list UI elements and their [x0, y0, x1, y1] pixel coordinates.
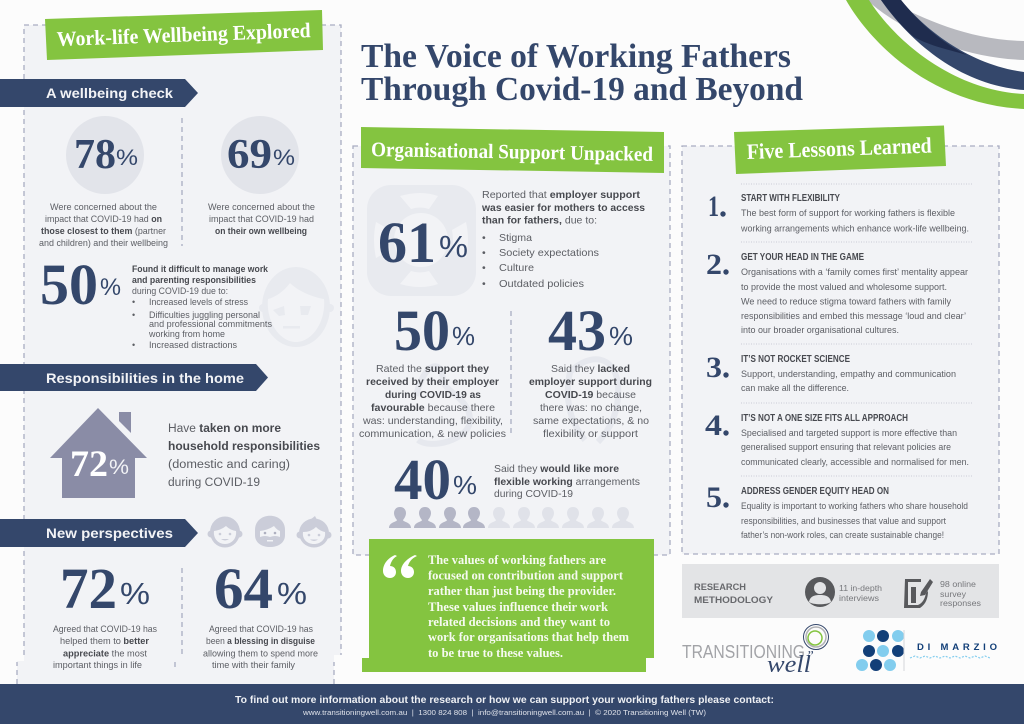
callout: quote: focused on contribution and support	[428, 568, 624, 582]
stat: 43% lacked support: same expectations, & no	[533, 415, 649, 427]
stat: 78%: those closest to them (partner	[41, 226, 166, 237]
lesson 4: communicated clearly, accessible and normalised for men.	[741, 457, 969, 468]
stat: 43% lacked support: Said they lacked	[551, 363, 630, 375]
callout: quote	[362, 539, 654, 672]
stat: 50% difficulty: •	[132, 297, 135, 307]
lesson 4: 4	[705, 409, 722, 442]
heading: work-life wellbeing explored	[45, 10, 323, 60]
callout: quote: related decisions and they want to	[428, 615, 610, 629]
lesson 1: working arrangements which enhance work-life wellbeing.	[740, 224, 969, 234]
stat: 61%: Society expectations	[499, 247, 599, 259]
main title: The Voice of Working Fathers	[361, 38, 791, 75]
panel: research methodology: survey	[940, 589, 967, 599]
stat: 43% lacked support: there was: no change,	[540, 402, 642, 414]
heading: five lessons learned	[734, 126, 946, 174]
stat: 50% difficulty	[40, 252, 272, 350]
icon: interview person	[805, 577, 835, 607]
footer	[0, 684, 1024, 724]
lesson 5: responsibilities, and businesses that value and support	[741, 516, 946, 527]
icon: bearded face	[255, 516, 285, 547]
stat: 50% difficulty: during COVID-19 due to:	[132, 286, 228, 296]
panel: research methodology: RESEARCH	[694, 582, 746, 593]
icon: quotation mark	[383, 555, 417, 578]
stat: 50% difficulty: working from home	[148, 329, 225, 339]
stat: 50% difficulty: and parenting responsibilities	[132, 275, 256, 285]
lesson 5: ADDRESS GENDER EQUITY HEAD ON	[741, 486, 889, 497]
stat: 69%: 69	[227, 132, 272, 178]
lesson 2: Organisations with a ‘family comes first’ mentality appear	[741, 267, 968, 278]
heading: organisational support unpacked	[361, 127, 664, 173]
lesson 2: responsibilities and embed this message ‘loud and clear’	[741, 311, 966, 322]
lesson 2: We need to reduce stigma toward fathers with family	[741, 296, 951, 308]
stat: 50% favourable: communication, & new policies	[359, 428, 506, 440]
ribbon: a wellbeing check	[0, 79, 198, 107]
stat: 72% perspective: Agreed that COVID-19 has	[53, 624, 157, 635]
stat: 69%: impact that COVID-19 had	[209, 214, 314, 225]
stat: 50% favourable: received by their employer	[366, 376, 499, 388]
stat: 43% lacked support: COVID-19 because	[545, 389, 636, 401]
lesson 2: into our broader organisational cultures.	[741, 325, 899, 336]
icon row: people pictogram	[389, 507, 634, 528]
stat: 50% difficulty: Increased distractions	[149, 340, 237, 350]
ribbon: responsibilities in the home	[0, 364, 268, 391]
stat: 40% flexible working: 40	[394, 447, 451, 512]
panel: research methodology: interviews	[839, 593, 879, 603]
icon: hand watermark right	[568, 359, 618, 442]
panel: research methodology	[682, 564, 999, 618]
ribbon: responsibilities in the home: Responsibilities in the home	[46, 370, 244, 386]
icon: survey document	[904, 579, 933, 608]
stat: 61%: •	[482, 278, 486, 290]
stat: 61%: •	[482, 247, 486, 259]
heading: organisational support unpacked: Organisational Support Unpacked	[371, 139, 654, 166]
panel: five lessons learned	[682, 126, 999, 554]
panel: research methodology: 98 online	[940, 579, 976, 589]
stat: 50% favourable: 50	[394, 298, 450, 363]
stat: 43% lacked support: flexibility or support	[543, 428, 638, 440]
stat: 50% difficulty: and professional commitments	[149, 319, 272, 329]
stat: 40% flexible working: during COVID-19	[494, 488, 573, 500]
stat: 61%: •	[482, 262, 486, 274]
logo: transitioning well: TRANSITIONING	[682, 642, 805, 662]
stat: 43% lacked support	[529, 298, 652, 440]
panel: work-life wellbeing	[0, 10, 341, 684]
text: household responsibilities: (domestic and caring)	[168, 459, 290, 471]
panel: research methodology: METHODOLOGY	[694, 595, 774, 606]
stat: 50% difficulty: %	[100, 274, 121, 301]
stat: 72% perspective: 72	[60, 556, 117, 621]
lesson 5: father’s non-work roles, can create sustainable change!	[741, 530, 944, 541]
stat: 61%: •	[482, 232, 486, 244]
lesson 4: generalised support ensuring that relevant policies are	[741, 442, 951, 453]
text: household responsibilities	[168, 423, 320, 489]
stat: 40% flexible working: flexible working arrangements	[494, 476, 640, 488]
text: household responsibilities: Have taken on more	[168, 423, 281, 435]
stat: 50% difficulty: •	[132, 310, 135, 320]
stat: 50% difficulty: 50	[40, 252, 98, 317]
stat: 40% flexible working	[394, 447, 640, 512]
stat: 64% perspective: 64	[214, 556, 273, 621]
stat: 72% perspective: appreciate the most	[63, 648, 147, 660]
lesson 2: GET YOUR HEAD IN THE GAME	[741, 252, 864, 263]
icon: child face	[296, 516, 332, 548]
stat: 72% perspective: helped them to better	[60, 636, 149, 647]
stat: 50% difficulty: •	[132, 340, 135, 350]
lesson 4	[705, 409, 969, 468]
callout: quote: work for organisations that help them	[428, 630, 630, 644]
stat: 50% favourable: was: understanding, flexibility,	[362, 415, 503, 427]
stat: 61%: Reported that employer support	[482, 189, 641, 201]
stat: 50% favourable: favourable because there	[371, 402, 495, 414]
lesson 2	[706, 248, 968, 336]
icon: lifebuoy watermark	[367, 185, 476, 296]
lesson 3: can make all the difference.	[741, 383, 849, 394]
lesson 1: 1	[708, 190, 719, 223]
stat: 78%	[39, 116, 168, 249]
stat: 50% difficulty: Found it difficult to manage work	[132, 264, 269, 274]
stat: 64% perspective: time with their family	[212, 660, 295, 671]
lesson 3	[706, 351, 956, 394]
stat: 69%: on their own wellbeing	[215, 226, 307, 237]
main title: Through Covid-19 and Beyond	[361, 71, 803, 108]
stat: 61%: Culture	[499, 262, 534, 274]
stat: 72% perspective	[53, 556, 157, 671]
stat: 78%: impact that COVID-19 had on	[45, 214, 162, 225]
logo: di marzio: DI MARZIO	[917, 642, 997, 653]
stat: 69%: Were concerned about the	[208, 202, 315, 213]
lesson 2: 2	[706, 248, 722, 281]
logo: transitioning well	[682, 624, 828, 678]
footer: www.transitioningwell.com.au | 1300 824 808 | info@transitioningwell.com.au | © 2020 Transitioning Well (TW)	[302, 708, 707, 717]
stat: 61%: 61	[378, 210, 436, 275]
lesson 1: START WITH FLEXIBILITY	[741, 193, 840, 204]
stat: 78%: 78	[74, 132, 116, 178]
callout: quote: These values influence their work	[428, 600, 608, 614]
stat: 50% difficulty: Increased levels of stress	[149, 297, 248, 307]
ribbon: a wellbeing check: A wellbeing check	[46, 85, 173, 101]
stat: 50% difficulty: Difficulties juggling personal	[149, 310, 260, 320]
stat: 72% perspective: important things in life	[53, 660, 142, 671]
panel: research methodology: responses	[940, 598, 981, 608]
ribbon: new perspectives: New perspectives	[46, 525, 173, 541]
stat: 64% perspective: Agreed that COVID-19 has	[209, 624, 313, 635]
callout: quote: to be true to these values.	[428, 646, 563, 660]
lesson 4: Specialised and targeted support is more effective than	[741, 428, 957, 439]
heading: work-life wellbeing explored: Work-life Wellbeing Explored	[56, 18, 311, 51]
stat: 61%: Stigma	[499, 232, 532, 244]
stat: 50% favourable	[359, 298, 506, 440]
stat: 50% favourable: during COVID-19 as	[385, 389, 481, 401]
lesson 5: 5	[706, 481, 722, 514]
logo: di marzio	[856, 630, 997, 671]
lesson 3: Support, understanding, empathy and communication	[741, 369, 956, 380]
stat: 64% perspective: allowing them to spend more	[203, 648, 318, 660]
logo: transitioning well: well	[767, 652, 811, 678]
lesson 2: to provide the most valued and wholesome support.	[741, 282, 947, 293]
stat: 50% favourable: %	[452, 321, 475, 351]
lesson 5: Equality is important to working fathers who share household	[741, 501, 968, 512]
stat: 64% perspective: been a blessing in disguise	[206, 636, 315, 647]
panel: organisational support	[353, 127, 670, 555]
decorative swoosh arcs	[846, 0, 1024, 109]
callout: quote: The values of working fathers are	[428, 553, 606, 567]
lesson 5	[706, 481, 968, 541]
stat: 43% lacked support: 43	[548, 298, 606, 363]
stat: 61%	[378, 189, 645, 290]
icon: house with 72%	[50, 408, 147, 498]
footer: To find out more information about the research or how we can support your working fathers please contact:	[235, 694, 774, 706]
stat: 61%: was easier for mothers to access	[481, 202, 645, 214]
icon: father face	[208, 516, 242, 548]
stat: 61%: %	[439, 229, 468, 264]
stat: 43% lacked support: %	[609, 321, 633, 351]
lesson 3: IT’S NOT ROCKET SCIENCE	[741, 354, 850, 365]
icon: house with 72%: %	[109, 456, 129, 479]
stat: 78%: Were concerned about the	[50, 202, 157, 213]
stat: 69%: %	[273, 145, 295, 170]
ribbon: new perspectives	[0, 519, 198, 547]
stat: 61%: Outdated policies	[499, 278, 584, 290]
text: household responsibilities: during COVID-19	[168, 477, 260, 489]
lesson 3: 3	[706, 351, 722, 384]
icon: house with 72%: 72	[70, 444, 108, 485]
stat: 50% favourable: Rated the support they	[376, 363, 489, 375]
icon: stressed face watermark	[259, 267, 334, 347]
stat: 43% lacked support: employer support during	[529, 376, 652, 388]
stat: 78%: %	[116, 145, 138, 170]
stat: 40% flexible working: Said they would like more	[494, 463, 619, 475]
stat: 78%: and children) and their wellbeing	[39, 238, 168, 249]
callout: quote: rather than just being the provider.	[428, 584, 616, 598]
stat: 64% perspective	[203, 556, 318, 671]
icon: hand watermark left	[416, 366, 470, 444]
stat: 69%	[208, 116, 315, 237]
logo: transitioning well: ”	[806, 649, 814, 664]
main title	[361, 38, 803, 108]
stat: 61%: than for fathers, due to:	[482, 214, 597, 226]
heading: five lessons learned: Five Lessons Learned	[746, 133, 932, 164]
lesson 1: The best form of support for working fathers is flexible	[741, 208, 955, 219]
lesson 1	[708, 190, 969, 234]
stat: 72% perspective: %	[120, 576, 150, 611]
stat: 40% flexible working: %	[453, 470, 477, 500]
lesson 4: IT’S NOT A ONE SIZE FITS ALL APPROACH	[741, 413, 908, 424]
text: household responsibilities: household responsibilities	[168, 441, 320, 453]
stat: 64% perspective: %	[277, 576, 307, 611]
panel: research methodology: 11 in-depth	[839, 583, 882, 593]
